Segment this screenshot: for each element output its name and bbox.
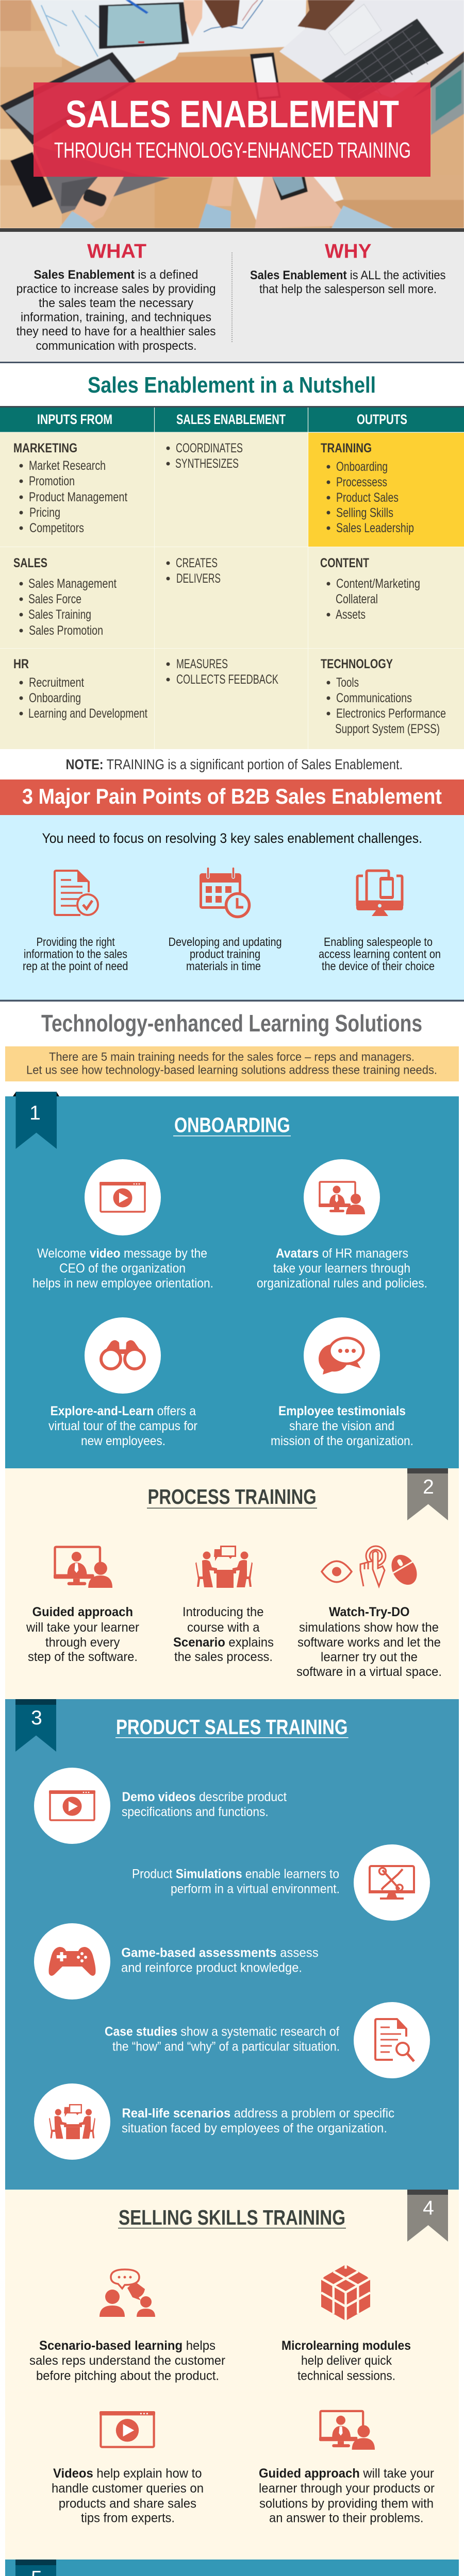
item: videos: tips from experts. bbox=[81, 2511, 175, 2526]
item: demo videos: Demo videos describe product bbox=[122, 1790, 287, 1804]
what text: information, training, and techniques bbox=[21, 310, 211, 325]
item: scenario bbox=[173, 1547, 274, 1664]
outputs column: TRAINING bbox=[321, 441, 372, 455]
item: explore and learn bbox=[48, 1317, 197, 1448]
callout: training needs: Let us see how technology-based learning solutions address these training needs. bbox=[26, 1063, 437, 1077]
outputs column: Sales Leadership bbox=[336, 521, 414, 535]
text: updating materials: Developing and updating bbox=[169, 935, 282, 948]
item: scenario-based learning: Scenario-based learning helps bbox=[39, 2338, 216, 2353]
what text: they need to have for a healthier sales bbox=[16, 325, 216, 338]
item: scenario: Introducing the bbox=[183, 1605, 264, 1619]
item: demo videos bbox=[34, 1768, 287, 1844]
item: watch try do: learner try out the bbox=[321, 1650, 418, 1664]
inputs column: Recruitment bbox=[29, 675, 84, 690]
title: sales enablement: SALES ENABLEMENT bbox=[65, 93, 399, 135]
item: scenario: course with a bbox=[187, 1620, 260, 1635]
table: sales enablement in a nutshell bbox=[0, 408, 464, 749]
item: guided approach: learner through your products or bbox=[259, 2481, 435, 2496]
text: right information: rep at the point of need bbox=[23, 959, 128, 973]
heading: product sales training: PRODUCT SALES TRAINING bbox=[116, 1715, 347, 1739]
inputs column: Promotion bbox=[29, 474, 75, 488]
item: guided approach: through every bbox=[45, 1635, 120, 1650]
inputs column: Onboarding bbox=[29, 691, 81, 705]
note: NOTE: TRAINING is a significant portion of Sales Enablement. bbox=[66, 756, 403, 772]
item: avatars: organizational rules and policies. bbox=[257, 1276, 427, 1291]
text: updating materials bbox=[169, 935, 282, 973]
outputs column: Onboarding bbox=[336, 460, 388, 474]
item: welcome video: helps in new employee orientation. bbox=[32, 1276, 213, 1291]
item: microlearning modules: technical sessions. bbox=[297, 2369, 395, 2383]
item: case studies: the “how” and “why” of a particular situation. bbox=[112, 2040, 340, 2054]
item: welcome video: Welcome video message by the bbox=[37, 1246, 207, 1261]
ribbon 1: 1 bbox=[29, 1102, 41, 1124]
panel: pain points bbox=[0, 815, 464, 1000]
inputs column: Sales Promotion bbox=[29, 623, 103, 638]
sales enablement column: SYNTHESIZES bbox=[175, 456, 239, 471]
item: employee testimonials: mission of the organization. bbox=[271, 1434, 413, 1448]
sales enablement column bbox=[166, 441, 278, 687]
item: guided approach bbox=[259, 2411, 435, 2526]
outputs column: Tools bbox=[336, 675, 359, 690]
outputs column: Content/Marketing bbox=[336, 577, 420, 591]
outputs column: Collateral bbox=[336, 592, 378, 606]
item: product simulations bbox=[132, 1844, 430, 1921]
inputs column: Pricing bbox=[29, 505, 60, 520]
outputs column: CONTENT bbox=[320, 556, 369, 570]
text: device of choice: Enabling salespeople to bbox=[324, 935, 433, 948]
item: explore and learn: Explore-and-Learn offers a bbox=[51, 1404, 196, 1418]
outputs column bbox=[320, 441, 446, 736]
column headers: SALES ENABLEMENT bbox=[176, 412, 286, 427]
item: microlearning modules: help deliver quick bbox=[301, 2353, 392, 2368]
heading: selling skills training: SELLING SKILLS TRAINING bbox=[119, 2206, 345, 2229]
heading band: pain points bbox=[0, 779, 464, 815]
ribbon 5 bbox=[15, 2560, 56, 2576]
heading: nutshell: Sales Enablement in a Nutshell bbox=[88, 372, 376, 398]
item: employee testimonials: Employee testimonials bbox=[278, 1404, 406, 1418]
heading: process training: PROCESS TRAINING bbox=[147, 1485, 317, 1509]
what heading: WHAT bbox=[87, 241, 146, 263]
inputs column: Sales Training bbox=[28, 607, 91, 622]
what text: communication with prospects. bbox=[36, 339, 197, 353]
why text: that help the salesperson sell more. bbox=[259, 282, 437, 296]
sales enablement column: DELIVERS bbox=[176, 571, 221, 586]
panel 5: sales leadership training bbox=[5, 2560, 459, 2576]
item: guided approach: step of the software. bbox=[28, 1650, 138, 1664]
sales enablement column: CREATES bbox=[176, 556, 218, 570]
inputs column: HR bbox=[13, 657, 29, 671]
ribbon 1 bbox=[13, 1092, 59, 1149]
item: guided approach: Guided approach will take your bbox=[259, 2466, 434, 2481]
inputs column: Sales Force bbox=[28, 592, 81, 606]
inputs column bbox=[13, 441, 147, 721]
item: product simulations: perform in a virtual environment. bbox=[171, 1882, 340, 1896]
text: device of choice: the device of their choice bbox=[322, 959, 435, 973]
ribbon 2 bbox=[407, 1468, 448, 1520]
item: welcome video: CEO of the organization bbox=[59, 1261, 186, 1276]
item: game-based assessments: and reinforce product knowledge. bbox=[121, 1961, 302, 1975]
item: videos: Videos help explain how to bbox=[53, 2466, 202, 2481]
item: scenario-based learning bbox=[29, 2269, 225, 2383]
item: guided approach: an answer to their problems. bbox=[269, 2511, 424, 2526]
ribbon 4: 4 bbox=[423, 2197, 434, 2219]
item: case studies bbox=[105, 2002, 430, 2078]
why text bbox=[250, 268, 445, 296]
heading: onboarding: ONBOARDING bbox=[174, 1113, 290, 1137]
inputs column: MARKETING bbox=[13, 441, 77, 455]
item: explore and learn: virtual tour of the campus for bbox=[48, 1419, 197, 1433]
item: guided approach: solutions by providing them with bbox=[259, 2497, 434, 2511]
inputs column: Competitors bbox=[29, 521, 84, 535]
ribbon 3 bbox=[15, 1699, 56, 1752]
outputs column: Processess bbox=[336, 475, 387, 489]
what text: the sales team the necessary bbox=[39, 296, 193, 310]
item: watch try do: software in a virtual space. bbox=[296, 1665, 442, 1679]
why text: Sales Enablement is ALL the activities bbox=[250, 268, 445, 282]
item: case studies: Case studies show a systematic research of bbox=[105, 2025, 339, 2039]
sales enablement column: COORDINATES bbox=[176, 441, 243, 455]
panel 1: onboarding bbox=[5, 1092, 459, 1468]
item: scenario-based learning: before pitching about the product. bbox=[36, 2369, 219, 2383]
item: videos bbox=[52, 2411, 204, 2526]
outputs column: Selling Skills bbox=[336, 506, 393, 520]
text: right information bbox=[23, 935, 128, 973]
item: product simulations: Product Simulations enable learners to bbox=[132, 1867, 339, 1882]
item: avatars: take your learners through bbox=[273, 1261, 410, 1276]
item: watch try do bbox=[296, 1546, 442, 1679]
inputs column: Learning and Development bbox=[28, 706, 147, 721]
icon: document check bbox=[55, 871, 98, 915]
item: scenario: the sales process. bbox=[174, 1650, 273, 1664]
inputs column: SALES bbox=[13, 556, 47, 570]
item: watch try do: software works and let the bbox=[297, 1635, 441, 1650]
item: real-life scenarios: situation faced by employees of the organization. bbox=[122, 2121, 387, 2136]
item: employee testimonials bbox=[271, 1317, 413, 1448]
item: explore and learn: new employees. bbox=[81, 1434, 165, 1448]
icon: eye, hand and mouse bbox=[322, 1546, 422, 1589]
item: game-based assessments: Game-based assessments assess bbox=[121, 1946, 319, 1960]
icon: calendar and clock bbox=[200, 867, 250, 917]
outputs column: Assets bbox=[336, 607, 366, 622]
sales enablement column: MEASURES bbox=[176, 657, 228, 671]
item: demo videos: specifications and functions. bbox=[122, 1805, 269, 1819]
panel 4: selling skills training bbox=[5, 2190, 459, 2560]
item: microlearning modules bbox=[281, 2265, 411, 2383]
inputs column: Product Management bbox=[29, 490, 127, 504]
intro text: You need to focus on resolving 3 key sales enablement challenges. bbox=[42, 831, 422, 846]
inputs column: Sales Management bbox=[28, 577, 117, 591]
item: videos: handle customer queries on bbox=[52, 2481, 204, 2496]
item: microlearning modules: Microlearning modules bbox=[281, 2338, 411, 2353]
item: scenario: Scenario explains bbox=[173, 1635, 274, 1650]
highlighted training cell bbox=[308, 433, 464, 547]
item: game-based assessments bbox=[34, 1923, 319, 1999]
panel: what and why bbox=[0, 232, 464, 362]
outputs column: Product Sales bbox=[336, 490, 399, 505]
item: welcome video bbox=[32, 1159, 213, 1291]
item: guided approach: Guided approach bbox=[32, 1605, 133, 1619]
hero title banner bbox=[34, 82, 430, 177]
why heading: WHY bbox=[325, 241, 371, 263]
what text bbox=[16, 268, 216, 353]
panel 2: process training bbox=[5, 1468, 459, 1699]
panel 3: product sales training bbox=[5, 1699, 459, 2190]
outputs column: Communications bbox=[336, 691, 412, 705]
item: real-life scenarios: Real-life scenarios address a problem or specific bbox=[122, 2106, 394, 2121]
inputs column: Market Research bbox=[29, 459, 106, 473]
text: updating materials: product training bbox=[190, 947, 260, 960]
text: right information: Providing the right bbox=[37, 935, 115, 948]
column headers: OUTPUTS bbox=[357, 412, 407, 427]
ribbon 2: 2 bbox=[423, 1476, 434, 1498]
outputs column: TECHNOLOGY bbox=[321, 657, 393, 671]
item: videos: products and share sales bbox=[59, 2497, 196, 2511]
text: device of choice: access learning content on bbox=[319, 947, 441, 960]
item: avatars bbox=[257, 1159, 427, 1291]
item: avatars: Avatars of HR managers bbox=[276, 1246, 408, 1261]
callout: training needs bbox=[5, 1046, 459, 1081]
item: watch try do: simulations show how the bbox=[299, 1620, 439, 1635]
item: real-life scenarios bbox=[34, 2083, 394, 2160]
ribbon 3: 3 bbox=[31, 1707, 42, 1729]
item: employee testimonials: share the vision and bbox=[289, 1419, 394, 1433]
hero photo background bbox=[0, 0, 464, 228]
item: guided approach bbox=[26, 1547, 139, 1664]
ribbon 4 bbox=[407, 2190, 448, 2242]
column headers bbox=[37, 412, 407, 427]
item: scenario-based learning: sales reps understand the customer bbox=[29, 2353, 225, 2368]
icon: devices bbox=[356, 871, 403, 916]
what text: Sales Enablement is a defined bbox=[34, 268, 198, 282]
callout: training needs: There are 5 main training needs for the sales force – reps and managers. bbox=[49, 1050, 415, 1063]
item: watch try do: Watch-Try-DO bbox=[329, 1605, 409, 1619]
text: right information: information to the sales bbox=[24, 947, 127, 960]
text: device of choice bbox=[319, 935, 441, 973]
item: guided approach: will take your learner bbox=[26, 1620, 139, 1635]
column headers: INPUTS FROM bbox=[37, 412, 112, 427]
sales enablement column: COLLECTS FEEDBACK bbox=[176, 672, 278, 687]
text: updating materials: materials in time bbox=[186, 959, 261, 973]
what text: practice to increase sales by providing bbox=[16, 282, 216, 296]
